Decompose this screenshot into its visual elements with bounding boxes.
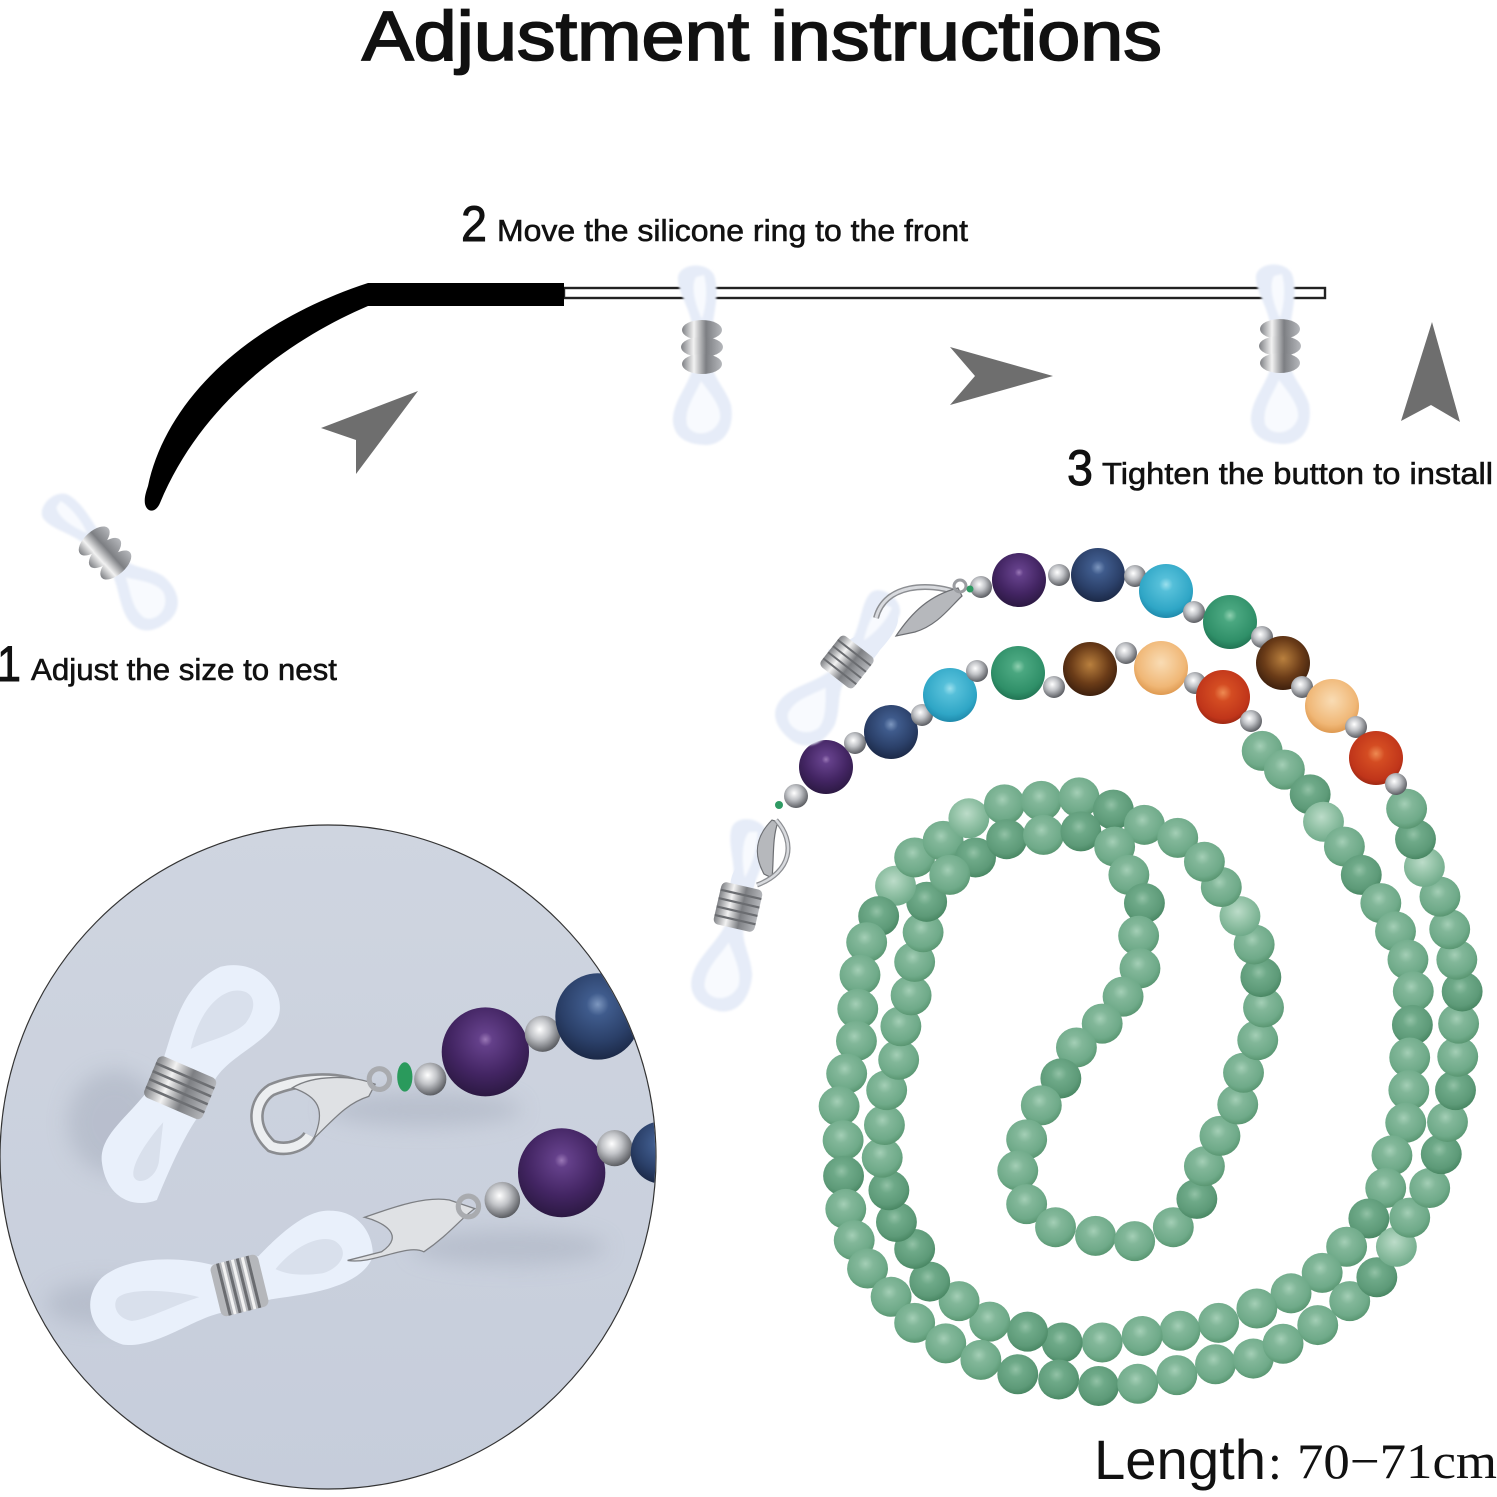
beads, lower <box>484 1122 656 1218</box>
necklace <box>686 548 1483 1406</box>
length label: 70−71cm <box>1297 1433 1497 1489</box>
step 1 label <box>0 636 337 692</box>
upper lobster clasp <box>876 580 974 636</box>
step 2 label: Move the silicone ring to the front <box>497 213 968 248</box>
length label: Length <box>1094 1428 1266 1491</box>
circular detail photo <box>0 825 692 1489</box>
lower gemstone strand <box>784 641 1262 808</box>
lower silicone ring <box>686 815 787 1017</box>
upper silicone ring <box>765 581 920 756</box>
silicone ring, upper <box>102 965 280 1203</box>
lobster clasp, upper <box>257 1062 412 1148</box>
lobster clasp, lower <box>348 1196 479 1261</box>
length label: : <box>1268 1434 1282 1490</box>
step 2 label: 2 <box>461 196 487 252</box>
lower lobster clasp <box>757 801 788 885</box>
step 3 label <box>1067 440 1493 496</box>
upper gemstone strand <box>970 548 1407 795</box>
silicone ring, lower <box>90 1211 373 1345</box>
beads, upper <box>414 973 640 1096</box>
step 1 label: Adjust the size to nest <box>31 652 337 687</box>
arrow: step 1 to 2 <box>321 391 418 474</box>
length label <box>1094 1428 1497 1491</box>
step 3 label: 3 <box>1067 440 1093 496</box>
silicone ring loose <box>33 476 188 641</box>
glasses temple arm <box>145 283 1325 511</box>
step 2 label <box>461 196 968 252</box>
arrow: step 2 to 3 <box>950 347 1053 405</box>
silicone ring tightened at arm end <box>1251 264 1310 444</box>
silicone ring at front of arm <box>673 265 732 445</box>
green aventurine beads <box>819 731 1483 1406</box>
soft shadows <box>47 1070 606 1325</box>
arrow: tighten <box>1401 322 1460 422</box>
step 3 label: Tighten the button to install <box>1102 456 1493 491</box>
